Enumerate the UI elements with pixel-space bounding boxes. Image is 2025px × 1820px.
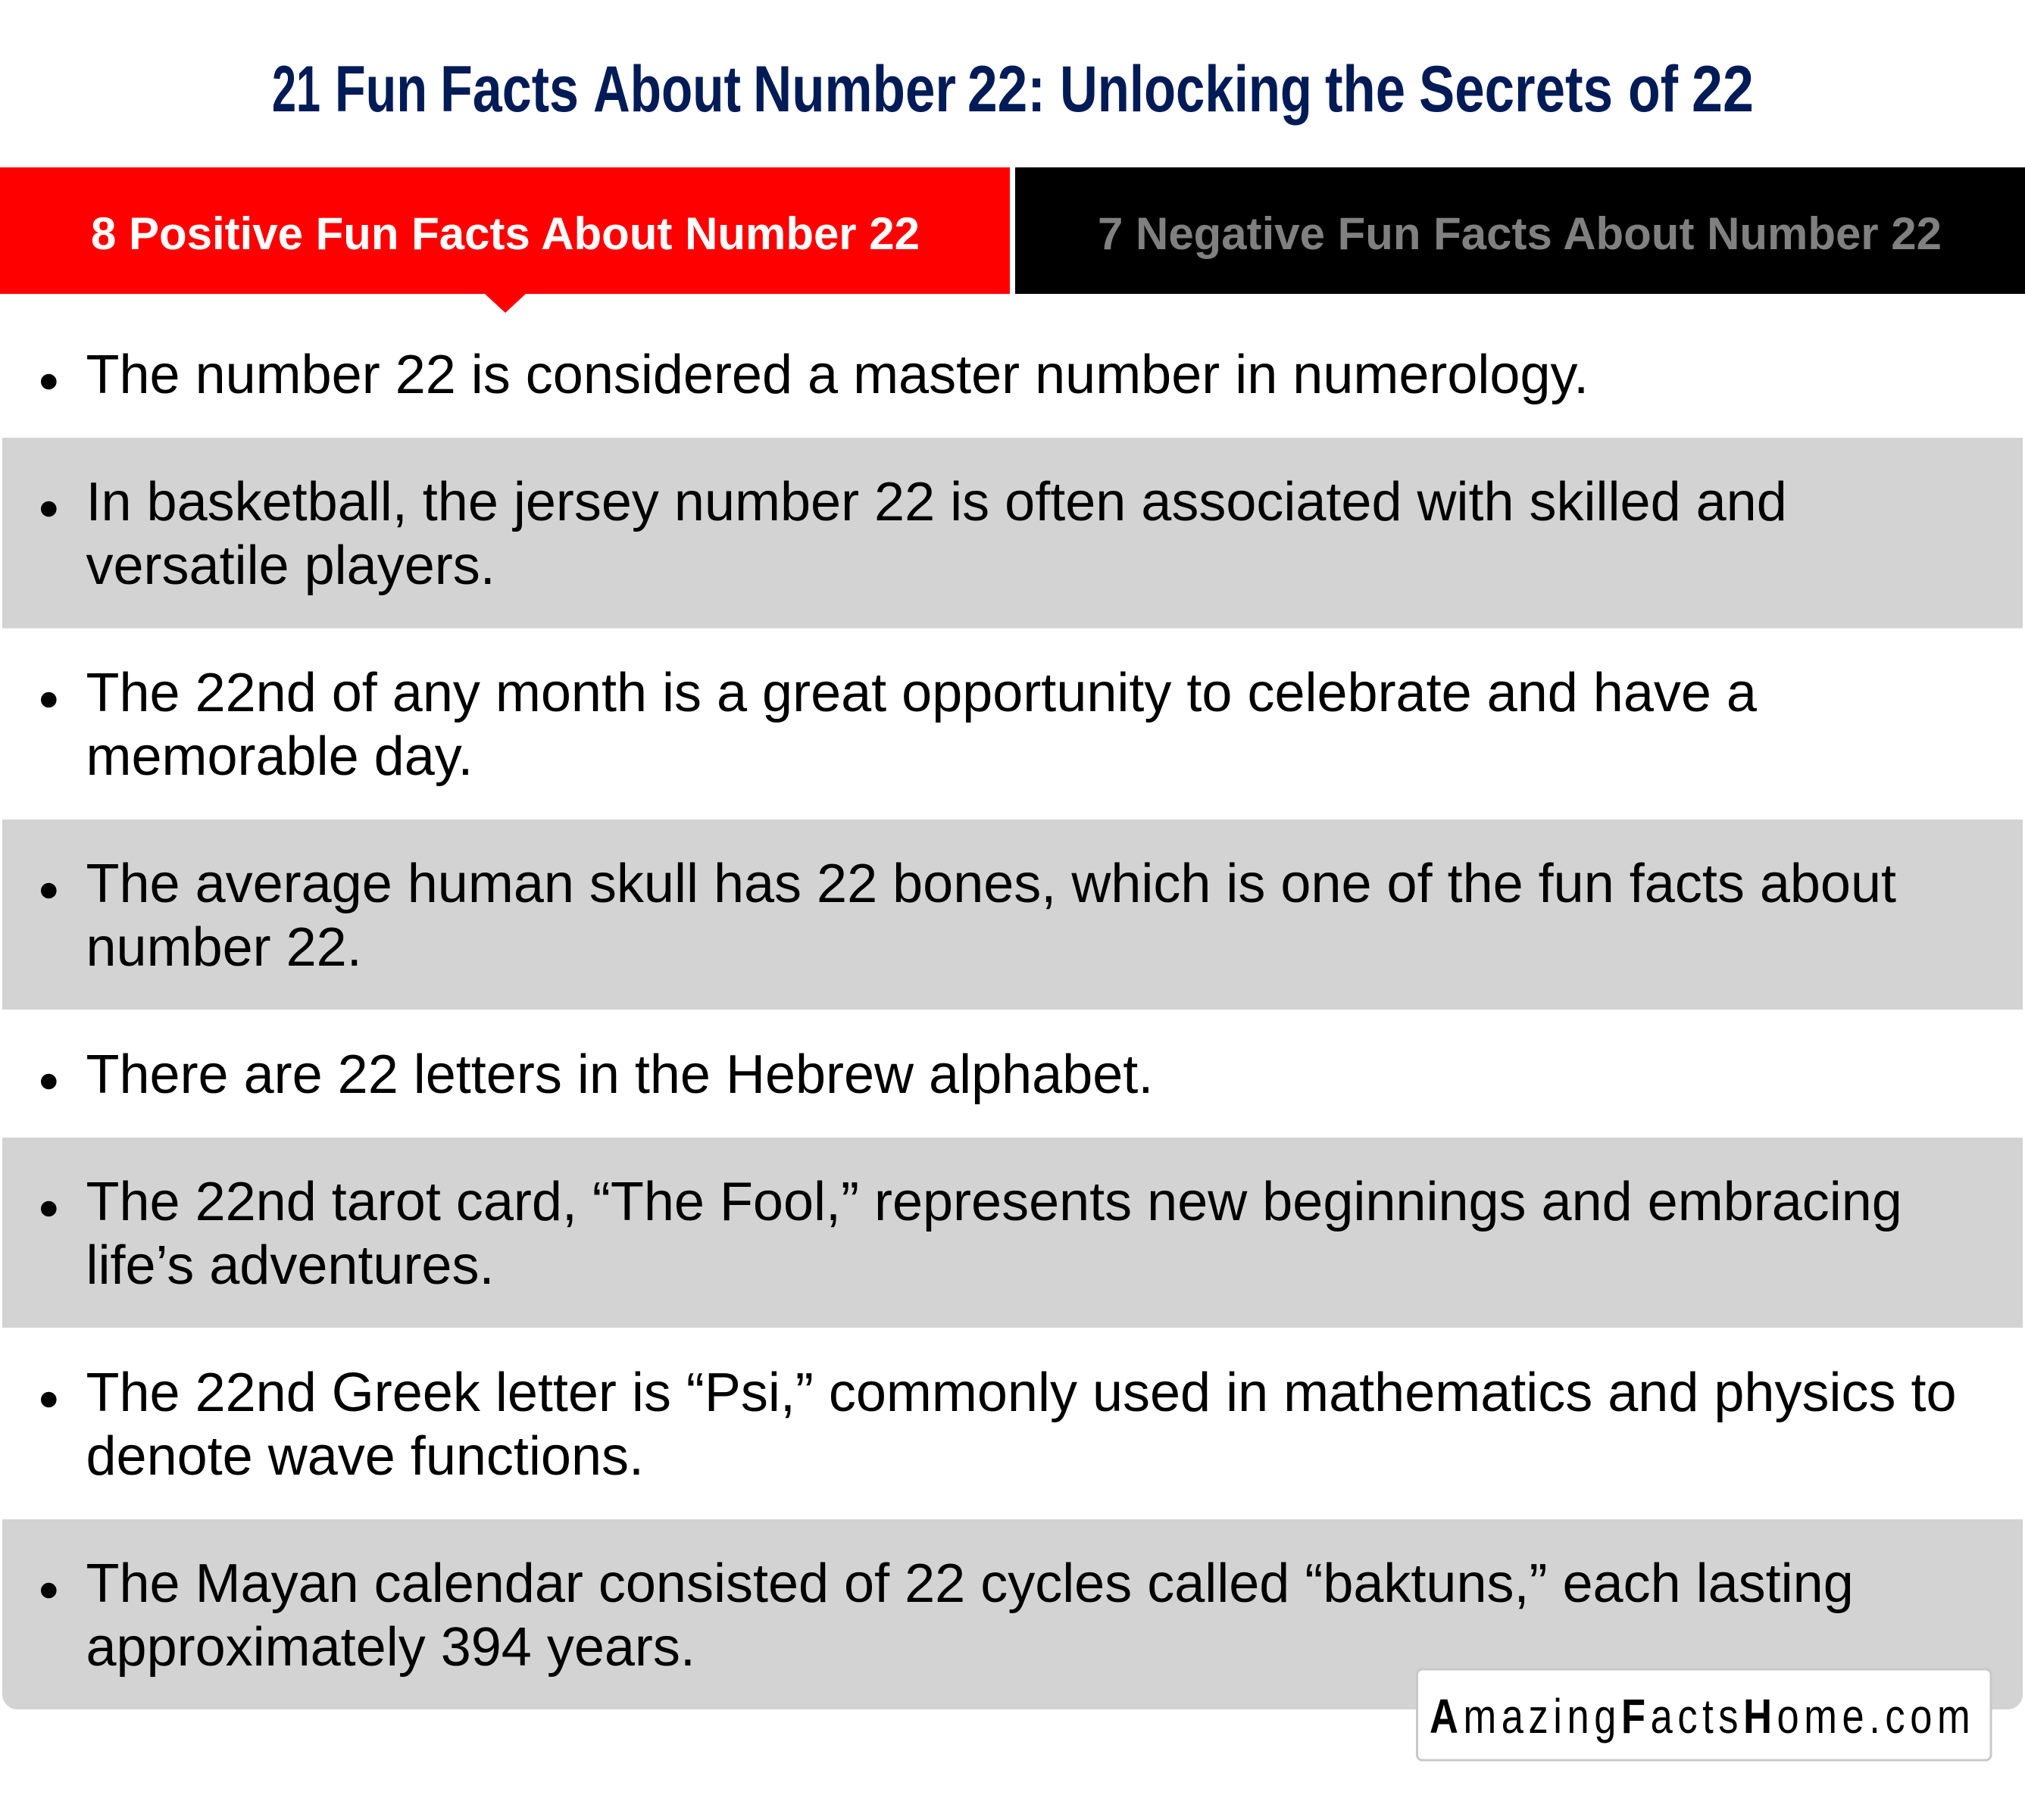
watermark badge: AmazingFactsHome.com [1430, 1690, 1975, 1744]
fact 6: The 22nd tarot card, “The Fool,” represents new beginnings and embracing [86, 1172, 1902, 1232]
title: Facts [440, 53, 579, 126]
fact 4: number 22. [86, 917, 362, 978]
fact 3 [41, 663, 1758, 787]
title: of [1628, 53, 1678, 126]
fact 8 [2, 1519, 2023, 1709]
fact 6: life’s adventures. [86, 1235, 494, 1296]
fact 4 [2, 819, 2023, 1010]
title: 22: [967, 53, 1045, 126]
title: Fun [335, 53, 427, 126]
fact 2: versatile players. [86, 535, 495, 596]
title: 21 [272, 53, 320, 126]
watermark badge [1417, 1669, 1991, 1760]
fact 5: There are 22 letters in the Hebrew alphabet. [86, 1044, 1153, 1105]
tab: negative facts (inactive): 7 Negative Fun Facts About Number 22 [1098, 208, 1942, 259]
fact 7: denote wave functions. [86, 1426, 644, 1487]
title: 22 [1692, 53, 1754, 126]
fact list panel [2, 345, 2023, 1709]
fact 8: approximately 394 years. [86, 1617, 695, 1678]
fact 3: The 22nd of any month is a great opportunity to celebrate and have a [86, 663, 1758, 723]
fact 2: In basketball, the jersey number 22 is often associated with skilled and [86, 472, 1787, 532]
fact 1: The number 22 is considered a master number in numerology. [86, 345, 1589, 405]
fact 2 [2, 438, 2023, 629]
fact 7 [41, 1363, 1957, 1487]
fact 7: The 22nd Greek letter is “Psi,” commonly used in mathematics and physics to [86, 1363, 1957, 1423]
title: About [593, 53, 741, 126]
title: Number [753, 53, 956, 126]
tab: positive facts (active): 8 Positive Fun Facts About Number 22 [91, 208, 920, 259]
title: Unlocking [1060, 53, 1312, 126]
tab: negative facts (inactive) [1015, 167, 2025, 294]
fact 3: memorable day. [86, 726, 473, 787]
title: Secrets [1419, 53, 1613, 126]
title: the [1325, 53, 1405, 126]
tab: positive facts (active) [0, 167, 1010, 313]
fact 4: The average human skull has 22 bones, which is one of the fun facts about [86, 854, 1896, 914]
fact 6 [2, 1138, 2023, 1328]
fact 8: The Mayan calendar consisted of 22 cycles called “baktuns,” each lasting [86, 1553, 1854, 1614]
